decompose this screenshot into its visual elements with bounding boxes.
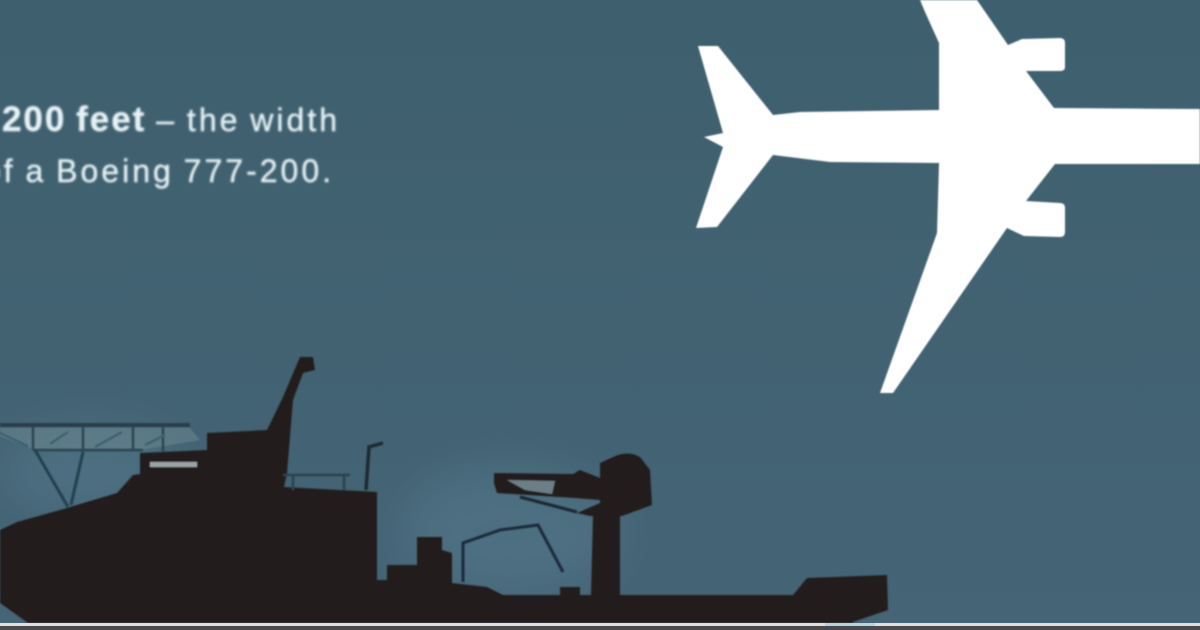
lighter haze around ship [0, 425, 620, 595]
crane arm [494, 470, 600, 500]
ship hull and superstructure [0, 357, 888, 623]
pale patch at lower edge [825, 623, 875, 626]
caption text: 200 feet – the width [2, 100, 340, 139]
icon: white airplane silhouette [696, 0, 1200, 393]
helideck truss [0, 425, 207, 507]
icon: research ship silhouette [0, 357, 888, 623]
bottom page edge strip [0, 623, 1200, 626]
superstructure window strip [150, 462, 197, 467]
caption text [0, 100, 340, 189]
mast railing [283, 475, 350, 490]
crane head [577, 454, 652, 516]
arched davit [463, 525, 563, 582]
